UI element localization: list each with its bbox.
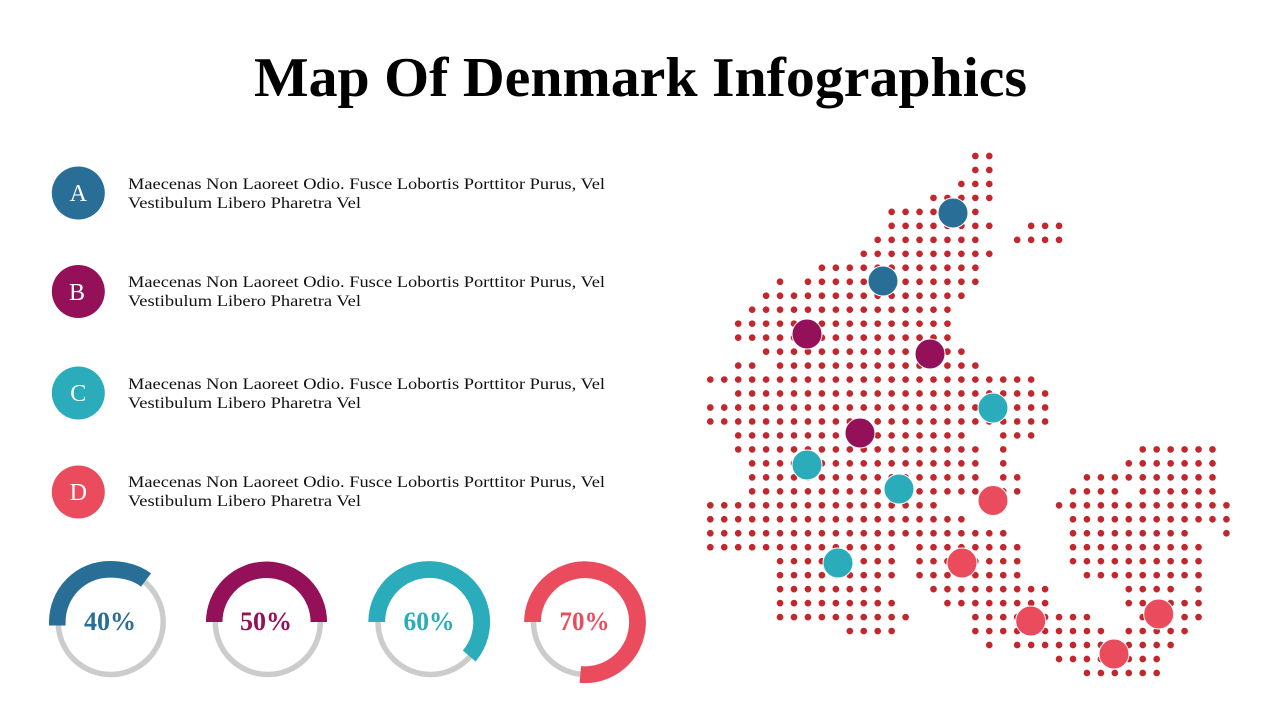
legend list <box>52 166 606 518</box>
badge B: B <box>69 280 85 306</box>
teal location markers <box>792 393 1008 578</box>
donut 50%: 50% <box>240 607 292 636</box>
dotted map of Denmark <box>710 156 1226 673</box>
donut 40% <box>57 569 163 674</box>
text block C <box>128 376 606 412</box>
text block A <box>128 176 606 212</box>
text block A: Vestibulum Libero Pharetra Vel <box>128 195 362 212</box>
title: Map Of Denmark Infographics <box>254 47 1027 109</box>
purple location markers <box>792 319 945 448</box>
text block A: Maecenas Non Laoreet Odio. Fusce Lobortis Porttitor Purus, Vel <box>128 176 606 193</box>
text block D: Vestibulum Libero Pharetra Vel <box>128 493 362 510</box>
donut charts <box>57 569 639 675</box>
donut 60%: 60% <box>404 607 454 636</box>
text block B: Vestibulum Libero Pharetra Vel <box>128 293 362 310</box>
legend row B <box>52 265 606 318</box>
badge A: A <box>70 181 88 207</box>
legend row D <box>52 466 606 518</box>
donut 70% <box>532 570 638 675</box>
coral location markers <box>947 486 1174 669</box>
donut 50% <box>214 570 320 674</box>
text block C: Maecenas Non Laoreet Odio. Fusce Lobortis Porttitor Purus, Vel <box>128 376 606 393</box>
badge A <box>52 166 105 220</box>
text block D <box>128 474 606 510</box>
badge C: C <box>70 381 86 407</box>
text block D: Maecenas Non Laoreet Odio. Fusce Lobortis Porttitor Purus, Vel <box>128 474 606 491</box>
donut 70%: 70% <box>560 607 610 636</box>
text block B <box>128 274 606 310</box>
donut 40%: 40% <box>84 607 136 636</box>
legend row A <box>52 166 606 220</box>
badge C <box>52 366 105 420</box>
badge D: D <box>70 480 87 506</box>
badge D <box>52 466 105 518</box>
badge B <box>52 265 105 318</box>
text block C: Vestibulum Libero Pharetra Vel <box>128 395 362 412</box>
map dots <box>710 156 1226 673</box>
legend row C <box>52 366 606 420</box>
blue location markers <box>868 198 968 296</box>
donut 60% <box>377 569 483 674</box>
text block B: Maecenas Non Laoreet Odio. Fusce Lobortis Porttitor Purus, Vel <box>128 274 606 291</box>
